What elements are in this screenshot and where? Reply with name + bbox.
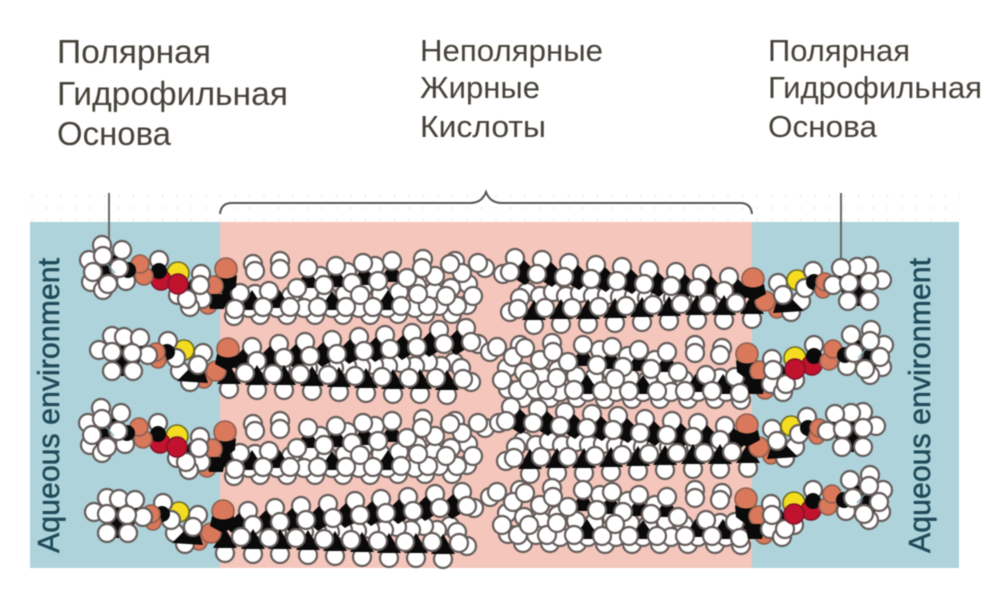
heading: right polar hydrophilic base: Основа (768, 109, 878, 144)
lipid: left row 1 (80, 236, 494, 325)
heading: left polar hydrophilic base: Полярная (57, 33, 211, 70)
heading: left polar hydrophilic base: Основа (57, 115, 172, 152)
heading: non-polar fatty acids: Неполярные (420, 33, 603, 68)
heading: non-polar fatty acids: Жирные (420, 70, 540, 105)
leader line: left (108, 193, 110, 245)
label: aqueous environment right: Aqueous environment (902, 258, 937, 553)
lipid: right row 1 (494, 249, 891, 334)
panel: non-polar lipid core (220, 222, 752, 568)
lipid: left row 2 (90, 319, 487, 404)
heading: right polar hydrophilic base: Гидрофильная (768, 70, 982, 105)
lipid: left row 3 (79, 399, 494, 485)
faint dotted band above panels (30, 186, 960, 222)
heading: left polar hydrophilic base (57, 33, 288, 152)
lipid: right row 3 (490, 398, 885, 483)
lipid: right row 4 (481, 466, 892, 554)
lipid: left row 4 (85, 483, 483, 568)
heading: right polar hydrophilic base: Полярная (768, 33, 910, 68)
brace over the fatty acid region (220, 192, 752, 214)
panel: right aqueous environment (752, 222, 959, 568)
heading: right polar hydrophilic base (768, 33, 982, 144)
panel: left aqueous environment (30, 222, 220, 568)
heading: non-polar fatty acids: Кислоты (420, 109, 546, 144)
lipid: right row 2 (481, 321, 893, 409)
heading: left polar hydrophilic base: Гидрофильная (57, 75, 288, 112)
heading: non-polar fatty acids (420, 33, 603, 144)
label: aqueous environment left: Aqueous environment (31, 258, 66, 553)
leader line: right (840, 193, 842, 262)
